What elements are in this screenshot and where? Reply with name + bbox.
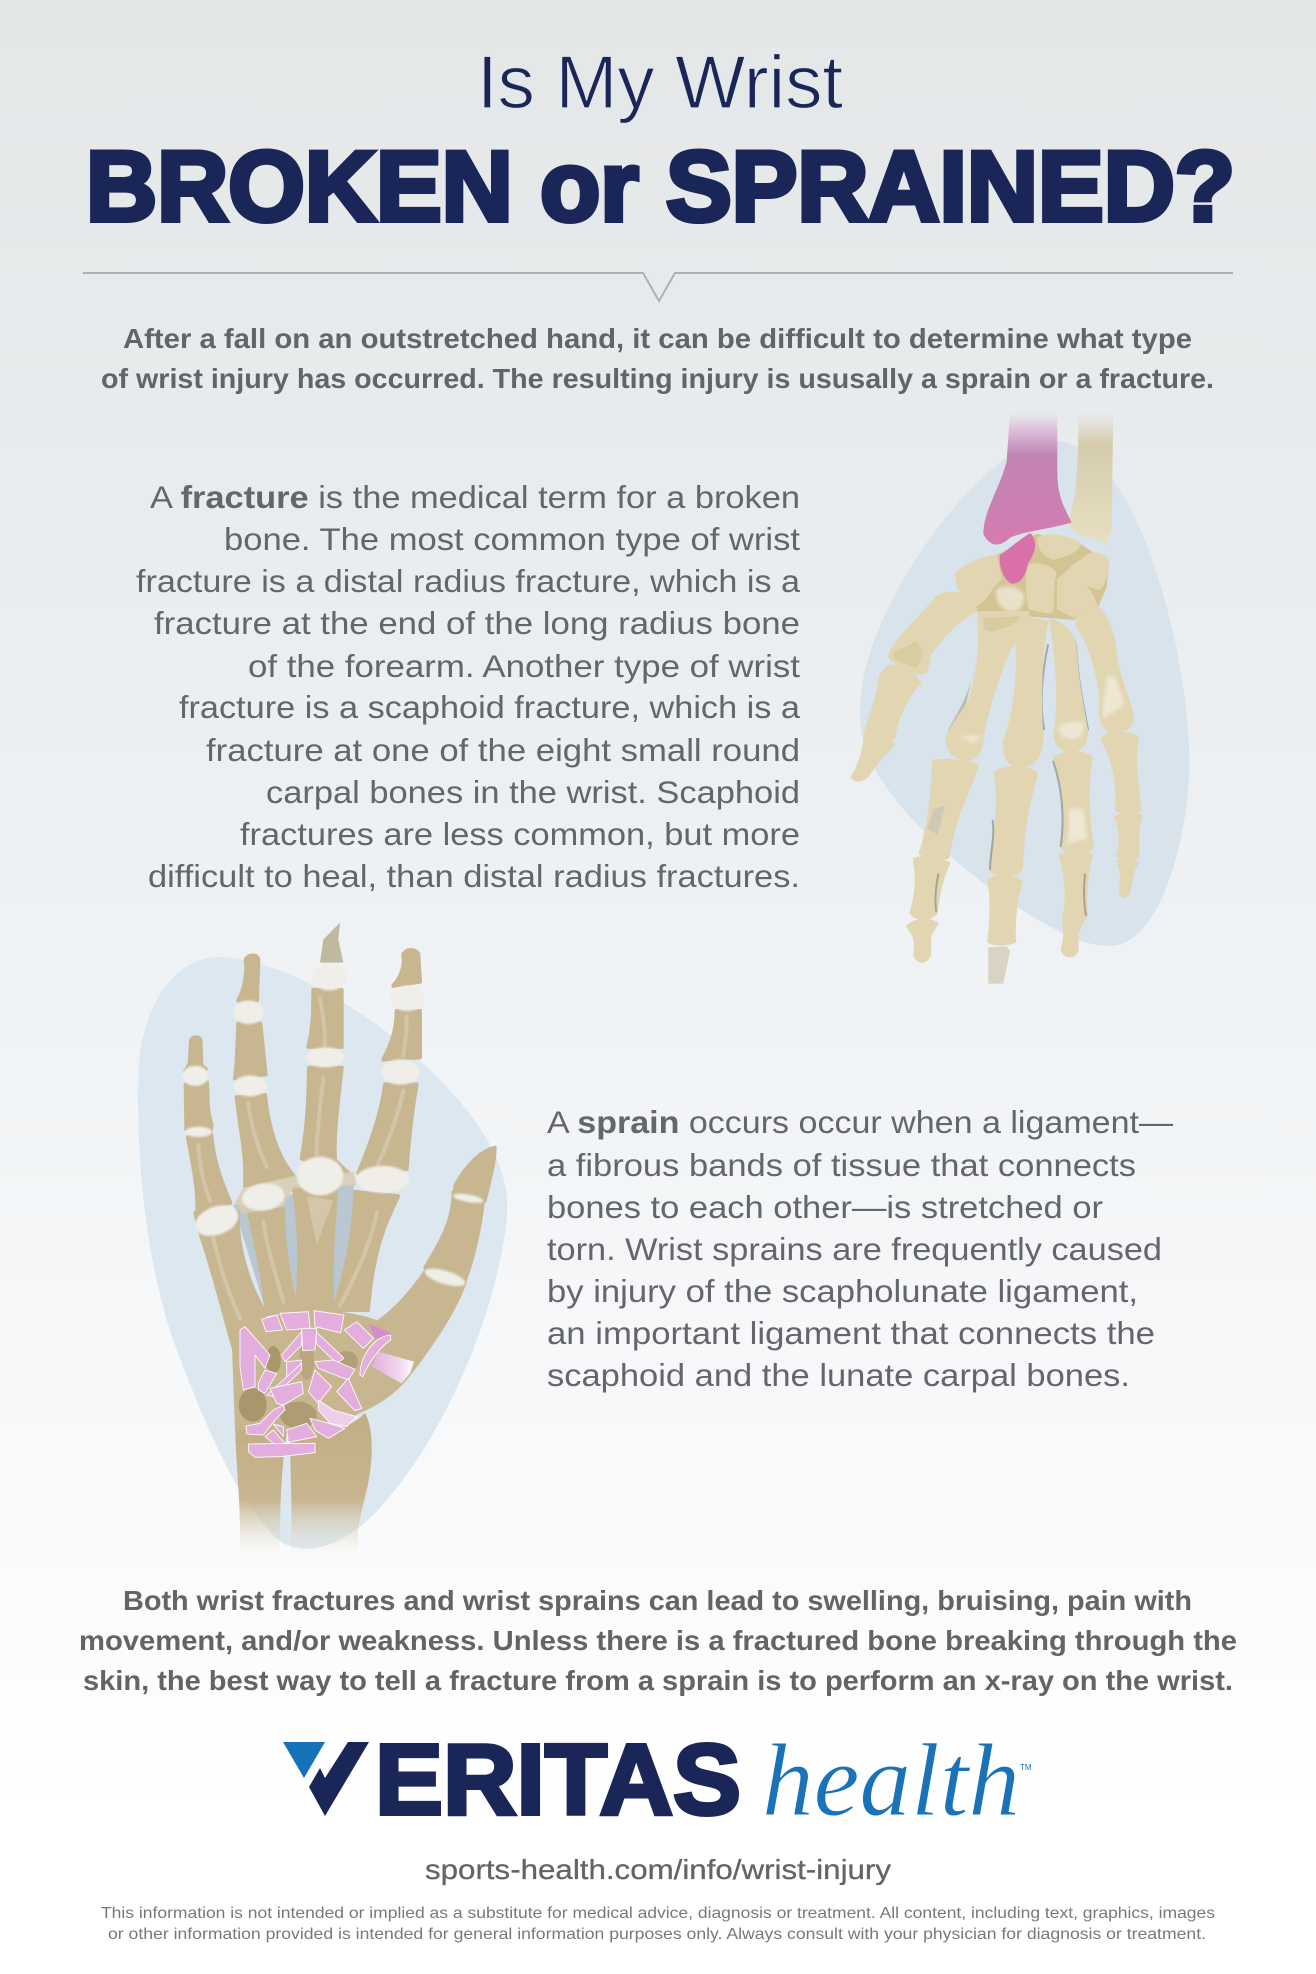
radius bone highlighted pink xyxy=(983,411,1072,545)
carpal bones under ligaments xyxy=(239,1340,358,1428)
fracture paragraph: fracture at one of the eight small round xyxy=(206,732,800,768)
fracture paragraph: fracture at the end of the long radius bone xyxy=(154,605,800,641)
illustration: hand skeleton with fracture sites highlighted xyxy=(852,411,1189,984)
distal phalanges xyxy=(907,860,1137,984)
sprain paragraph: A sprain occurs occur when a ligament— xyxy=(547,1104,1174,1140)
fracture paragraph: fractures are less common, but more xyxy=(240,816,800,852)
white joint cartilage xyxy=(182,964,484,1290)
forearm bones xyxy=(235,1413,372,1554)
carpal bones xyxy=(956,534,1109,620)
metacarpals xyxy=(195,1188,398,1348)
ligament bands xyxy=(240,1311,414,1457)
palm shadow xyxy=(233,1184,360,1314)
sprain paragraph: scaphoid and the lunate carpal bones. xyxy=(547,1357,1130,1393)
middle phalanges xyxy=(911,814,1142,944)
trademark symbol: TM xyxy=(1020,1763,1032,1772)
summary text xyxy=(79,1585,1237,1696)
disclaimer: or other information provided is intended for general information purposes only. Always consult with your physician for diagnosis or treatment. xyxy=(108,1926,1206,1943)
fracture paragraph: A fracture is the medical term for a broken xyxy=(150,479,800,515)
fracture paragraph: of the forearm. Another type of wrist xyxy=(248,648,800,684)
illustration: hand with wrist ligaments highlighted xyxy=(138,923,507,1554)
divider with notch xyxy=(83,273,1233,301)
logo: Veritas Health xyxy=(283,1723,1032,1838)
middle finger xyxy=(301,923,348,1173)
fracture paragraph: difficult to heal, than distal radius fractures. xyxy=(148,858,800,894)
proximal phalanges xyxy=(920,733,1141,876)
scaphoid bone highlighted pink xyxy=(1000,533,1035,584)
fracture paragraph: bone. The most common type of wrist xyxy=(224,521,800,557)
fracture paragraph: carpal bones in the wrist. Scaphoid xyxy=(266,774,800,810)
summary text: movement, and/or weakness. Unless there is a fractured bone breaking through the xyxy=(79,1625,1237,1656)
carpal mass xyxy=(233,1313,387,1432)
fracture paragraph: fracture is a scaphoid fracture, which is a xyxy=(179,689,801,725)
title line: BROKEN or SPRAINED?: BROKEN or SPRAINED? xyxy=(86,130,1235,242)
intro text: of wrist injury has occurred. The resulting injury is ususally a sprain or a fracture. xyxy=(101,363,1214,394)
disclaimer: This information is not intended or implied as a substitute for medical advice, diagnosis or treatment. All content, including text, graphics, images xyxy=(101,1905,1215,1922)
metacarpal bones xyxy=(946,607,1133,767)
ulna xyxy=(1068,411,1113,545)
sprain paragraph: an important ligament that connects the xyxy=(547,1315,1155,1351)
blue blob backdrop xyxy=(860,440,1189,946)
summary text: Both wrist fractures and wrist sprains can lead to swelling, bruising, pain with xyxy=(123,1585,1192,1616)
fracture paragraph xyxy=(136,479,801,894)
disclaimer xyxy=(101,1905,1215,1943)
thumb bones xyxy=(852,593,977,780)
title xyxy=(86,40,1235,242)
intro text xyxy=(101,323,1214,394)
illustration: pink wrist ligaments xyxy=(239,1311,414,1457)
summary text: skin, the best way to tell a fracture from a sprain is to perform an x-ray on the wrist. xyxy=(83,1665,1233,1696)
thumb xyxy=(353,1148,495,1411)
sprain paragraph: by injury of the scapholunate ligament, xyxy=(547,1273,1138,1309)
logo wordmark: ERITAS: ERITAS xyxy=(375,1724,741,1836)
sprain paragraph: bones to each other—is stretched or xyxy=(547,1189,1103,1225)
sprain paragraph: torn. Wrist sprains are frequently caused xyxy=(547,1231,1162,1267)
website URL: sports-health.com/info/wrist-injury xyxy=(425,1854,891,1885)
little finger xyxy=(185,1037,231,1211)
sprain paragraph: a fibrous bands of tissue that connects xyxy=(547,1147,1136,1183)
ring finger xyxy=(235,956,293,1186)
logo wordmark: health: health xyxy=(762,1723,1020,1838)
thumb-web shadow xyxy=(373,1301,407,1331)
blue blob backdrop xyxy=(138,957,507,1549)
logo mark: navy V stroke xyxy=(309,1742,369,1816)
index finger xyxy=(358,950,420,1173)
fracture paragraph: fracture is a distal radius fracture, which is a xyxy=(136,563,801,599)
intro text: After a fall on an outstretched hand, it can be difficult to determine what type xyxy=(123,323,1192,354)
logo mark: blue triangle xyxy=(283,1742,325,1778)
knuckle connecting bands xyxy=(235,1172,357,1214)
sprain paragraph xyxy=(547,1104,1174,1393)
title line: Is My Wrist: Is My Wrist xyxy=(477,40,843,124)
